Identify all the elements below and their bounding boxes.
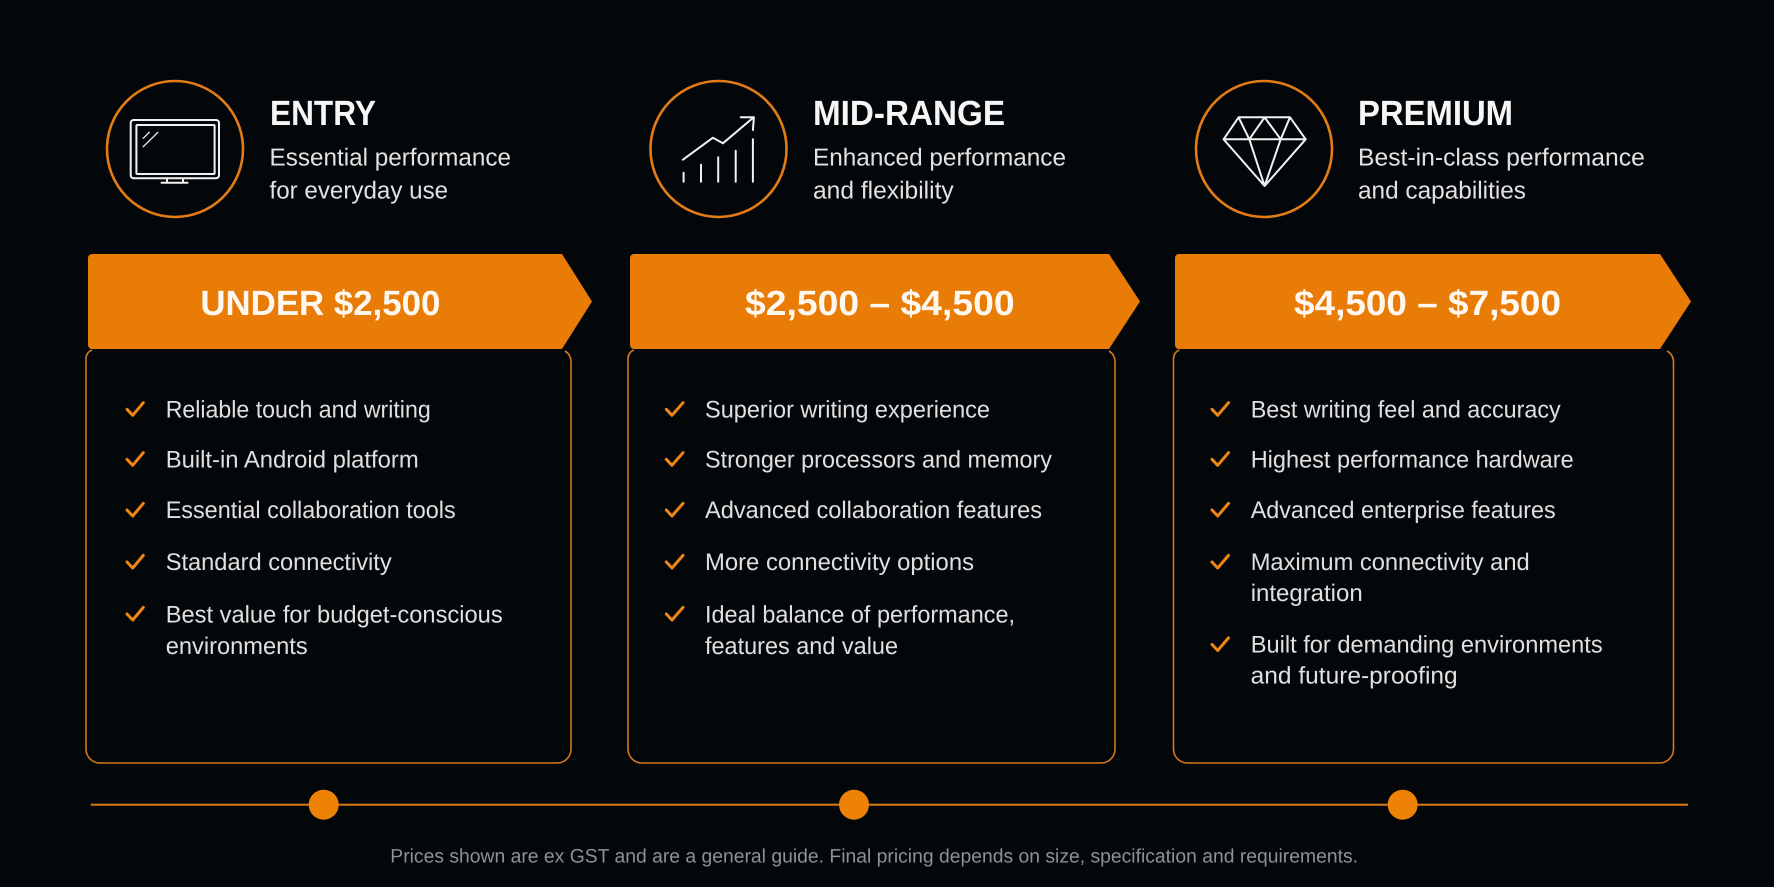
feature text: Stronger processors and memory [705, 446, 1052, 473]
text: premium description: and capabilities [1358, 178, 1526, 205]
heading: premium: PREMIUM [1358, 94, 1513, 133]
panel: premium [1174, 81, 1691, 763]
icon: check [666, 607, 683, 620]
text: premium description: Best-in-class performance [1358, 144, 1645, 171]
feature text: Superior writing experience [705, 396, 990, 423]
feature text: Built for demanding environments [1251, 631, 1603, 658]
feature text: Best value for budget-conscious [166, 601, 503, 628]
text: mid-range description: and flexibility [813, 178, 954, 205]
feature text: Ideal balance of performance, [705, 601, 1015, 628]
price banner: entry [88, 254, 592, 349]
heading: entry: ENTRY [270, 94, 376, 133]
icon: check [1212, 638, 1228, 650]
price banner: mid-range: $2,500 – $4,500 [745, 284, 1015, 323]
panel: mid-range [628, 81, 1140, 763]
feature list: entry [127, 396, 503, 660]
feature list: premium [1212, 396, 1603, 689]
icon: check [666, 453, 683, 465]
heading: mid-range: MID-RANGE [813, 94, 1005, 133]
feature text: Essential collaboration tools [166, 497, 456, 524]
icon: check [127, 453, 143, 465]
icon: monitor in ring [107, 81, 243, 217]
feature text: Advanced enterprise features [1251, 497, 1556, 524]
text: premium description [1358, 144, 1645, 205]
feature text [166, 601, 503, 660]
feature text: Built-in Android platform [166, 446, 419, 473]
text: entry description: Essential performance [270, 144, 511, 171]
feature text: More connectivity options [705, 549, 974, 576]
text: entry description: for everyday use [270, 178, 448, 205]
feature text [1251, 631, 1603, 689]
icon: check [1212, 555, 1228, 568]
timeline [91, 790, 1688, 820]
icon: check [1212, 503, 1228, 516]
icon: check [127, 403, 143, 415]
card outline: mid-range [628, 350, 1115, 763]
feature text: integration [1251, 580, 1363, 607]
feature text [1251, 549, 1530, 607]
icon: rising chart in ring [650, 81, 786, 217]
feature text: Best writing feel and accuracy [1251, 396, 1561, 423]
text: mid-range description: Enhanced performance [813, 144, 1066, 171]
price banner: entry: UNDER $2,500 [200, 284, 440, 323]
timeline marker: mid-range [839, 790, 869, 820]
feature text: environments [166, 633, 308, 660]
icon: check [127, 607, 143, 620]
timeline marker: entry [309, 790, 339, 820]
icon: diamond in ring [1196, 81, 1332, 217]
icon: check [666, 403, 683, 415]
icon: check [666, 555, 683, 568]
text: mid-range description [813, 144, 1066, 205]
feature list: mid-range [666, 396, 1052, 660]
feature text [705, 601, 1015, 660]
price banner: premium [1175, 254, 1691, 349]
icon: check [127, 555, 143, 568]
feature text: and future-proofing [1251, 662, 1458, 689]
price banner: mid-range [630, 254, 1140, 349]
feature text: Standard connectivity [166, 549, 392, 576]
price banner: premium: $4,500 – $7,500 [1294, 284, 1561, 323]
feature text: Advanced collaboration features [705, 497, 1042, 524]
icon: check [127, 503, 143, 516]
card outline: premium [1174, 350, 1674, 763]
feature text: features and value [705, 633, 898, 660]
icon: check [1212, 403, 1228, 415]
footnote: Prices shown are ex GST and are a general guide. Final pricing depends on size, specification and requirements. [390, 846, 1358, 868]
feature text: Maximum connectivity and [1251, 549, 1530, 576]
feature text: Highest performance hardware [1251, 446, 1574, 473]
icon: check [1212, 453, 1228, 465]
text: entry description [270, 144, 511, 205]
card outline: entry [86, 350, 571, 763]
panel: entry [86, 81, 592, 763]
icon: check [666, 503, 683, 516]
feature text: Reliable touch and writing [166, 396, 431, 423]
timeline marker: premium [1388, 790, 1418, 820]
